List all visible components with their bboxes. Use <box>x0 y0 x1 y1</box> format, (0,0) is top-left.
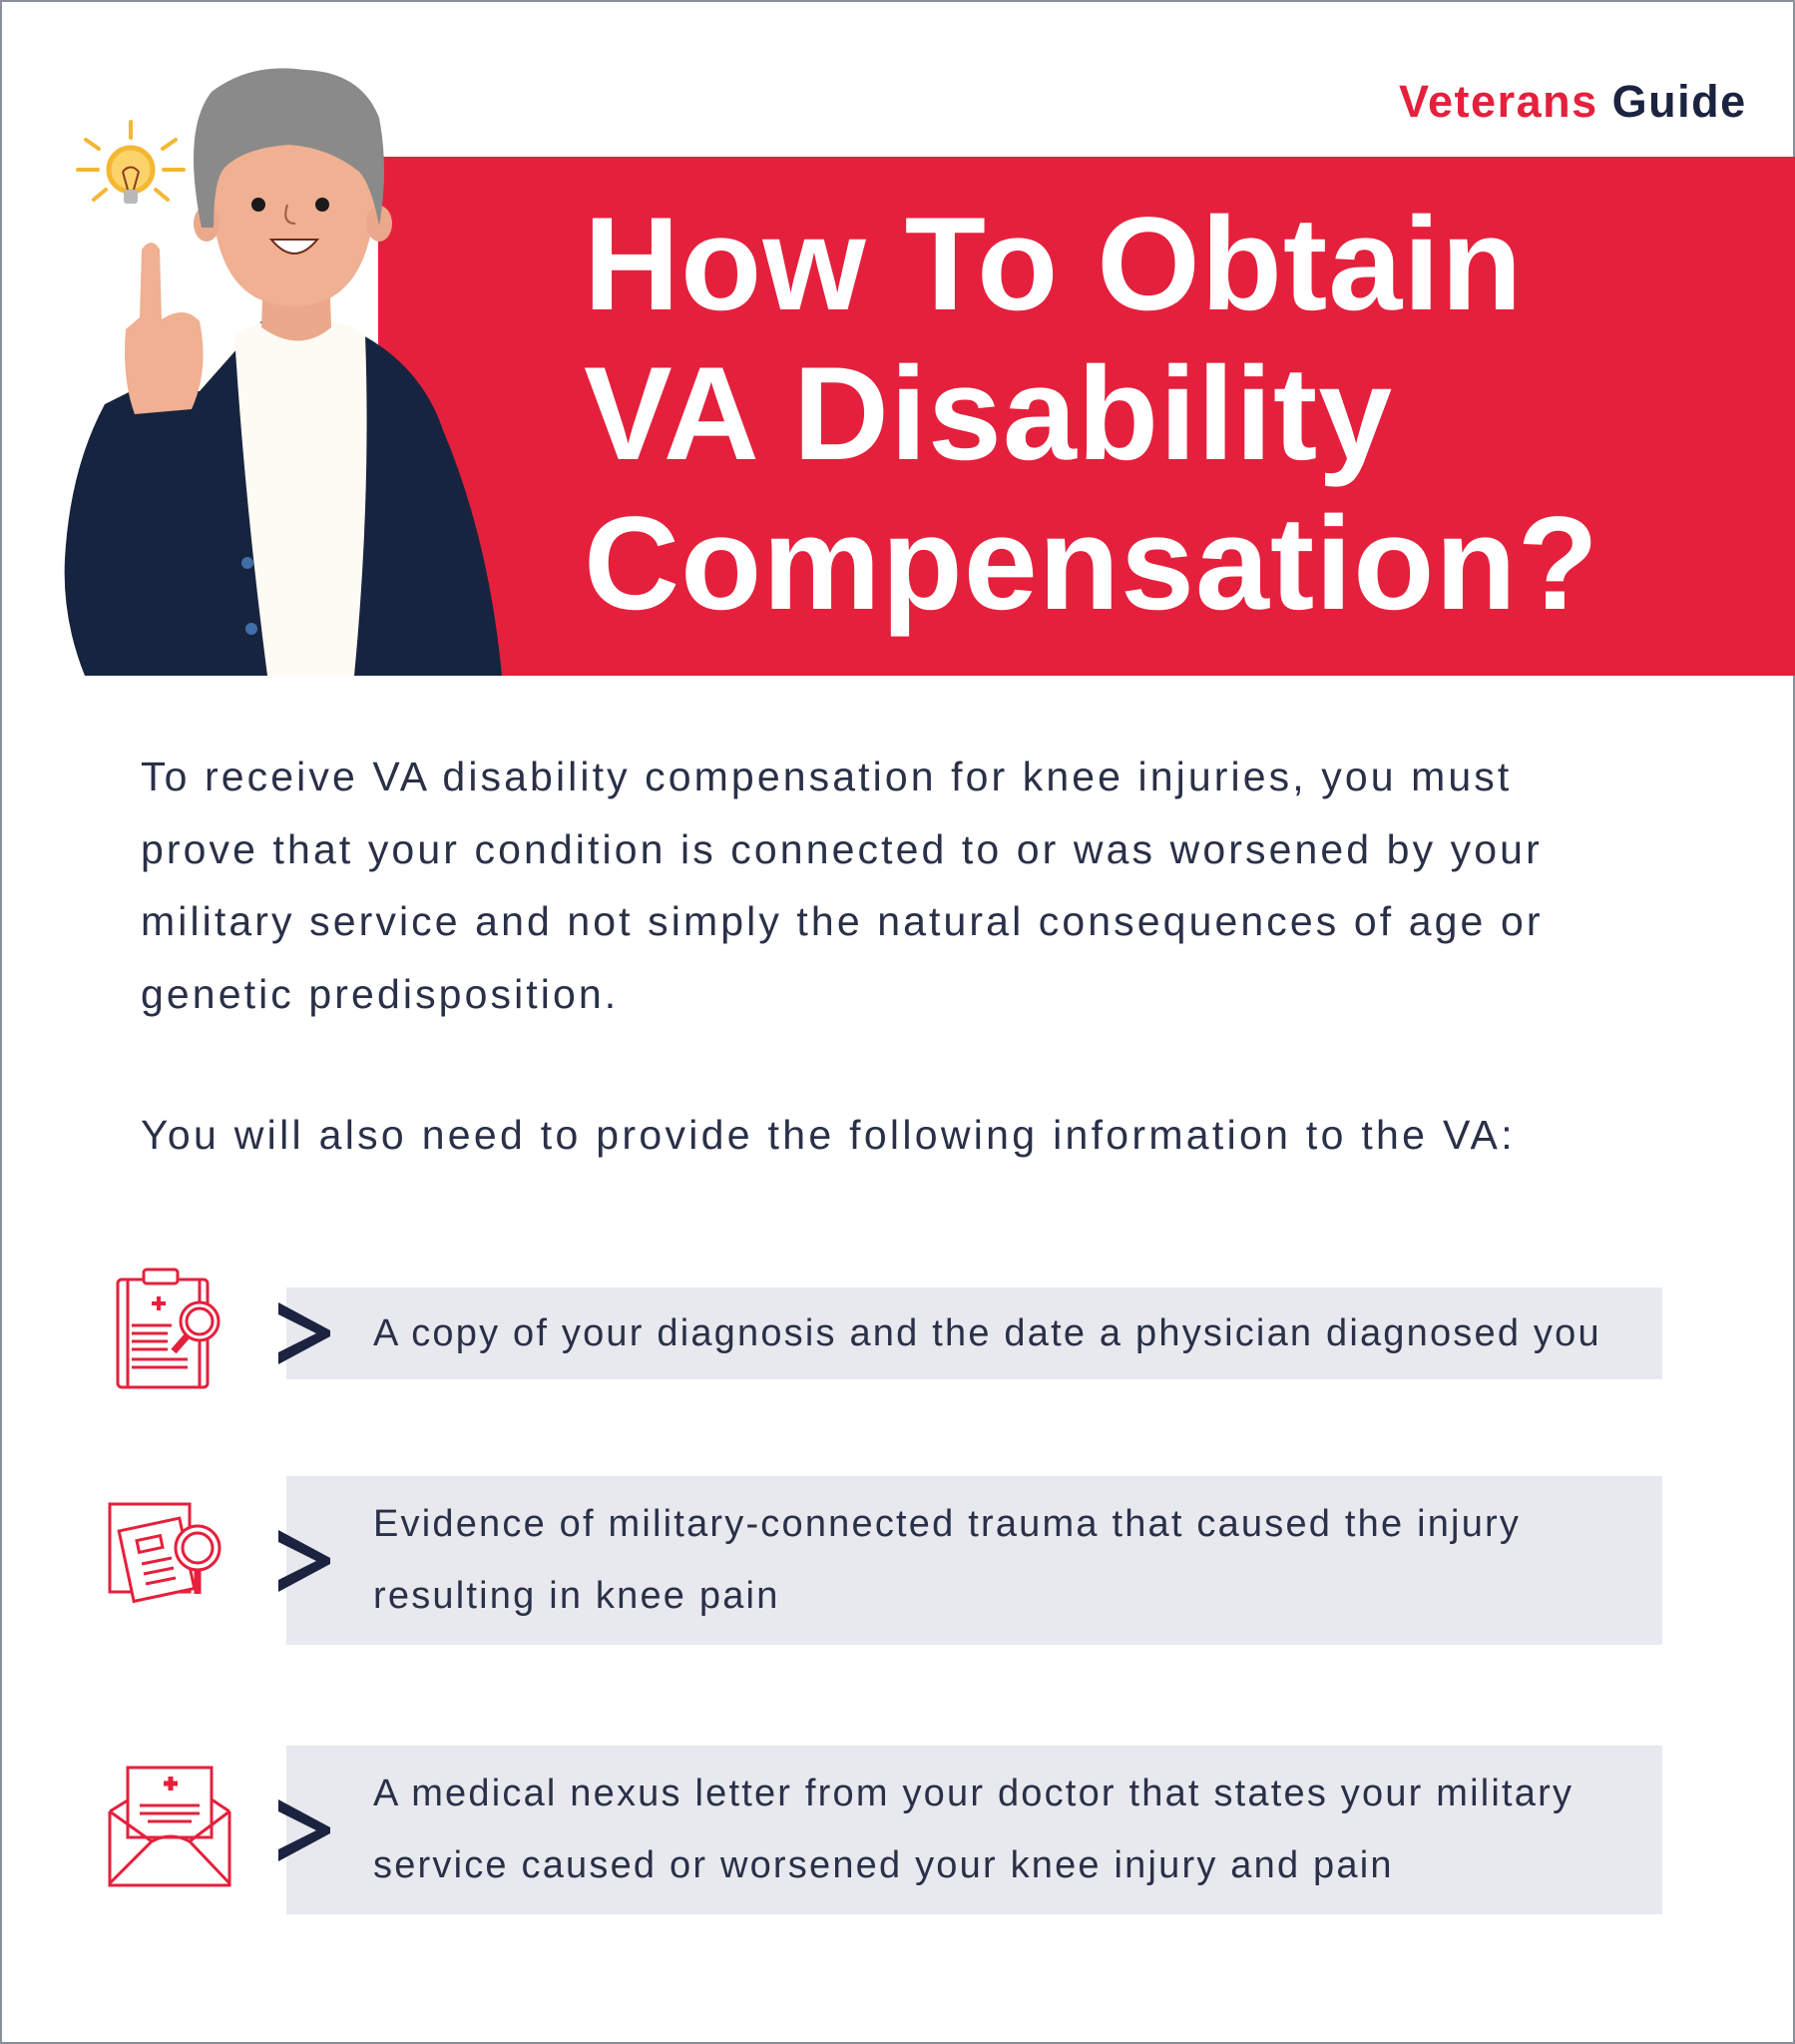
intro paragraph: prove that your condition is connected to or was worsened by your <box>141 826 1543 872</box>
icon: evidence document <box>108 1503 222 1603</box>
intro paragraph: genetic predisposition. <box>141 970 619 1016</box>
title: How To Obtain <box>584 191 1523 338</box>
red title banner <box>378 157 1795 676</box>
hair <box>194 68 384 228</box>
icon: clipboard diagnosis <box>116 1268 220 1389</box>
item 3 <box>108 1746 1662 1914</box>
item 1 <box>116 1268 1662 1389</box>
box 2 <box>286 1476 1662 1645</box>
box 1: A copy of your diagnosis and the date a physician diagnosed you <box>373 1312 1601 1354</box>
title: Compensation? <box>584 490 1599 638</box>
shirt <box>234 317 367 676</box>
box 3: service caused or worsened your knee injury and pain <box>373 1844 1394 1886</box>
arrow chevron <box>278 1530 330 1592</box>
box 3 <box>286 1746 1662 1914</box>
arrow chevron <box>278 1302 330 1364</box>
neck <box>261 269 331 341</box>
intro paragraph <box>141 754 1544 1016</box>
hand <box>125 243 204 414</box>
item 2 <box>108 1476 1662 1645</box>
jacket <box>65 317 502 676</box>
box 2: resulting in knee pain <box>373 1575 780 1617</box>
icon: light bulb <box>78 122 184 204</box>
logo: Veterans Guide <box>1399 76 1747 127</box>
icon: medical letter envelope <box>108 1767 231 1886</box>
face <box>212 120 375 306</box>
title <box>584 191 1599 638</box>
box 1 <box>286 1287 1662 1379</box>
box 3: A medical nexus letter from your doctor that states your military <box>373 1773 1573 1814</box>
intro paragraph: To receive VA disability compensation for knee injuries, you must <box>141 754 1512 799</box>
box 2: Evidence of military-connected trauma that caused the injury <box>373 1503 1521 1545</box>
lead text: You will also need to provide the following information to the VA: <box>141 1112 1516 1158</box>
character illustration <box>64 68 502 676</box>
intro paragraph: military service and not simply the natural consequences of age or <box>141 898 1544 944</box>
arrow chevron <box>278 1799 330 1861</box>
title: VA Disability <box>584 340 1393 488</box>
